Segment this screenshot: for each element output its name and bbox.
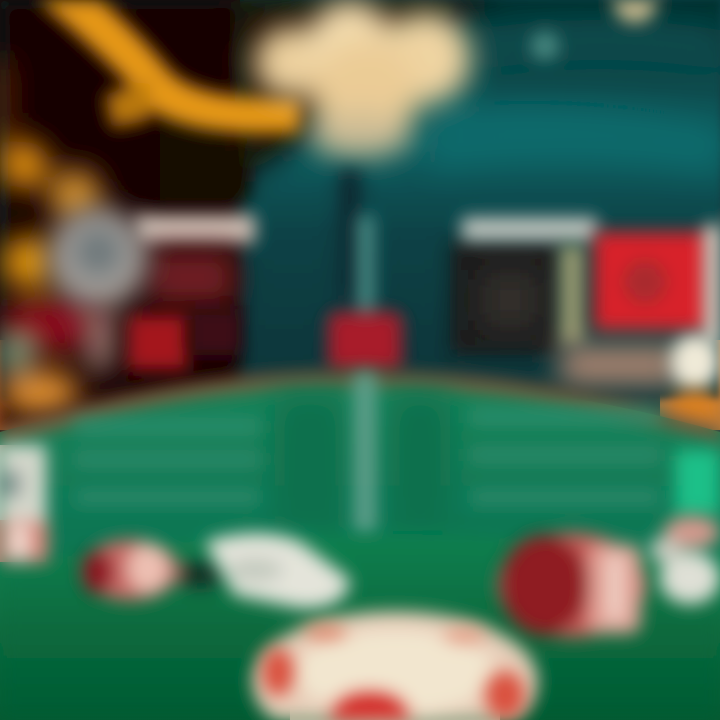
table felt: [0, 372, 720, 570]
chips: far right: [649, 516, 720, 604]
table rail: [0, 372, 720, 450]
left card stack: [0, 445, 48, 562]
left sign: white banner and roulette wheel: [48, 208, 255, 370]
chip pile: centre white: [205, 534, 350, 608]
large foreground chip: [253, 612, 537, 720]
central post and red chip stack: [328, 170, 402, 370]
chip pile: right red: [498, 533, 646, 637]
cream cloud light: [254, 0, 471, 157]
chip pile: left: [82, 540, 222, 600]
left: orange and red decor: [0, 60, 101, 414]
foreground felt: [0, 534, 720, 720]
orange swoosh: [38, 0, 300, 133]
background: dark wall and teal backdrop: [0, 0, 720, 430]
right sign: dark panel, white banner, red card: [450, 218, 720, 426]
background lights: [531, 0, 657, 60]
